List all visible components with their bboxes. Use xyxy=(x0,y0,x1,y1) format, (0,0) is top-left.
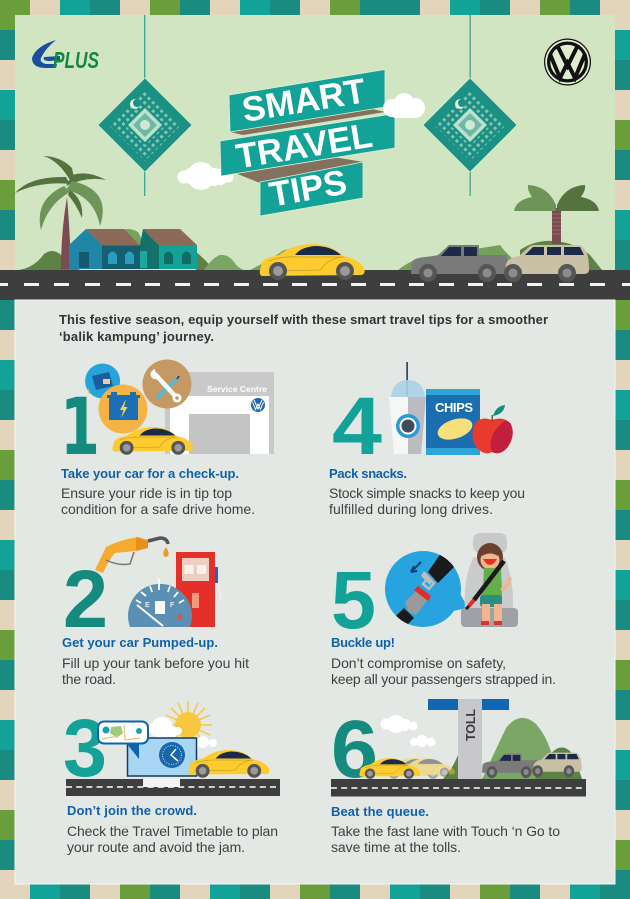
toll gantry xyxy=(428,699,509,779)
intro text: ‘balik kampung’ journey. xyxy=(59,329,214,344)
Volkswagen logo xyxy=(544,38,591,86)
left palm tree xyxy=(15,156,106,269)
icon: fuel pump xyxy=(176,552,221,627)
tip 4 body: Stock simple snacks to keep you xyxy=(329,485,525,501)
cloud left xyxy=(178,162,234,190)
tip 3 body xyxy=(67,823,278,855)
tip 3 heading: Don’t join the crowd. xyxy=(67,803,197,818)
kampung houses xyxy=(69,229,197,269)
number 2: 2 xyxy=(63,554,108,645)
tip 5 body: Don’t compromise on safety, xyxy=(331,655,506,671)
tip 4 body xyxy=(329,485,525,517)
tip 2 body: the road. xyxy=(62,671,116,687)
tip 1 body xyxy=(61,485,255,517)
yellow beetle xyxy=(113,427,193,455)
icon: apple xyxy=(472,405,513,453)
tip 6 body xyxy=(331,823,560,855)
main road xyxy=(0,270,630,300)
number 5: 5 xyxy=(331,555,376,646)
grey pickup truck xyxy=(411,245,507,282)
intro text: This festive season, equip yourself with these smart travel tips for a smoother xyxy=(59,312,548,327)
icon: drink cup xyxy=(389,362,426,454)
number 3: 3 xyxy=(63,703,107,794)
tip 6: toll xyxy=(331,699,586,855)
icon: computer monitor xyxy=(128,738,196,787)
icon: sun xyxy=(164,701,212,749)
tip 4 heading: Pack snacks. xyxy=(329,466,407,481)
clouds xyxy=(380,715,436,747)
icon: blue circle xyxy=(85,364,120,398)
yellow beetle car xyxy=(260,244,365,280)
intro text xyxy=(59,312,548,344)
yellow beetle xyxy=(359,758,420,779)
tip 4 body: fulfilled during long drives. xyxy=(329,501,493,517)
service centre building: Service Centre xyxy=(207,384,267,394)
hills xyxy=(443,718,582,779)
tip 3 body: your route and avoid the jam. xyxy=(67,839,245,855)
tip 1 heading: Take your car for a check-up. xyxy=(61,466,239,481)
icon: fuel gauge: E xyxy=(145,602,150,609)
tip 6 heading: Beat the queue. xyxy=(331,804,429,819)
PLUS logo: PLUS xyxy=(53,47,99,73)
number 1: 1 xyxy=(60,383,100,473)
tip 1: check-up xyxy=(60,360,274,517)
tip 5 body: keep all your passengers strapped in. xyxy=(331,671,556,687)
beige wagon car xyxy=(504,245,589,282)
PLUS logo xyxy=(32,40,99,73)
tip 5 body xyxy=(331,655,556,687)
cloud right xyxy=(383,93,425,118)
tip 2 body: Fill up your tank before you hit xyxy=(62,655,249,671)
title banner xyxy=(220,70,395,216)
hills xyxy=(18,229,602,270)
road xyxy=(331,779,586,796)
tip 2: fuel xyxy=(62,537,249,687)
tip 1 body: Ensure your ride is in tip top xyxy=(61,485,232,501)
number 6: 6 xyxy=(331,704,378,795)
icon: fuel gauge: F xyxy=(170,602,175,609)
icon: fuel gauge xyxy=(128,579,192,627)
icon: wrench and screwdriver xyxy=(142,360,192,408)
tip 5 heading: Buckle up! xyxy=(331,635,395,650)
icon: chips packet xyxy=(426,389,480,455)
faded moving beetles xyxy=(383,758,455,779)
hanging ketupat right xyxy=(423,15,517,196)
panel: tips xyxy=(15,300,615,884)
tip 3 body: Check the Travel Timetable to plan xyxy=(67,823,278,839)
tip 5: seat belt xyxy=(331,533,556,687)
tip 4: snacks xyxy=(329,362,525,517)
icon: chips packet: CHIPS xyxy=(435,400,473,415)
tip 1 body: condition for a safe drive home. xyxy=(61,501,255,517)
panel: header scene xyxy=(15,15,615,270)
hanging ketupat left xyxy=(98,15,192,196)
title text: TIPS xyxy=(266,163,350,215)
right palm tree xyxy=(514,185,599,244)
tip 2 body xyxy=(62,655,249,687)
cloud behind monitor xyxy=(149,717,217,748)
title text: SMART xyxy=(239,71,368,130)
icon: child in car seat xyxy=(461,533,518,627)
number 4: 4 xyxy=(332,381,382,472)
title text: TRAVEL xyxy=(233,116,375,176)
tip 3: timetable xyxy=(63,701,280,855)
tip 6 body: save time at the tolls. xyxy=(331,839,461,855)
grey pickup xyxy=(482,754,538,778)
icon: fuel nozzle xyxy=(95,537,169,573)
tip 6 body: Take the fast lane with Touch ‘n Go to xyxy=(331,823,560,839)
icon: map speech bubble xyxy=(98,722,148,759)
toll gantry: TOLL xyxy=(464,709,478,741)
yellow beetle xyxy=(189,750,269,778)
road xyxy=(66,779,280,796)
service centre building xyxy=(165,372,274,454)
icon: buckle callout xyxy=(385,551,468,632)
title text xyxy=(233,71,375,215)
beige wagon xyxy=(532,753,582,777)
icon: battery xyxy=(98,384,148,434)
tip 2 heading: Get your car Pumped-up. xyxy=(62,635,218,650)
